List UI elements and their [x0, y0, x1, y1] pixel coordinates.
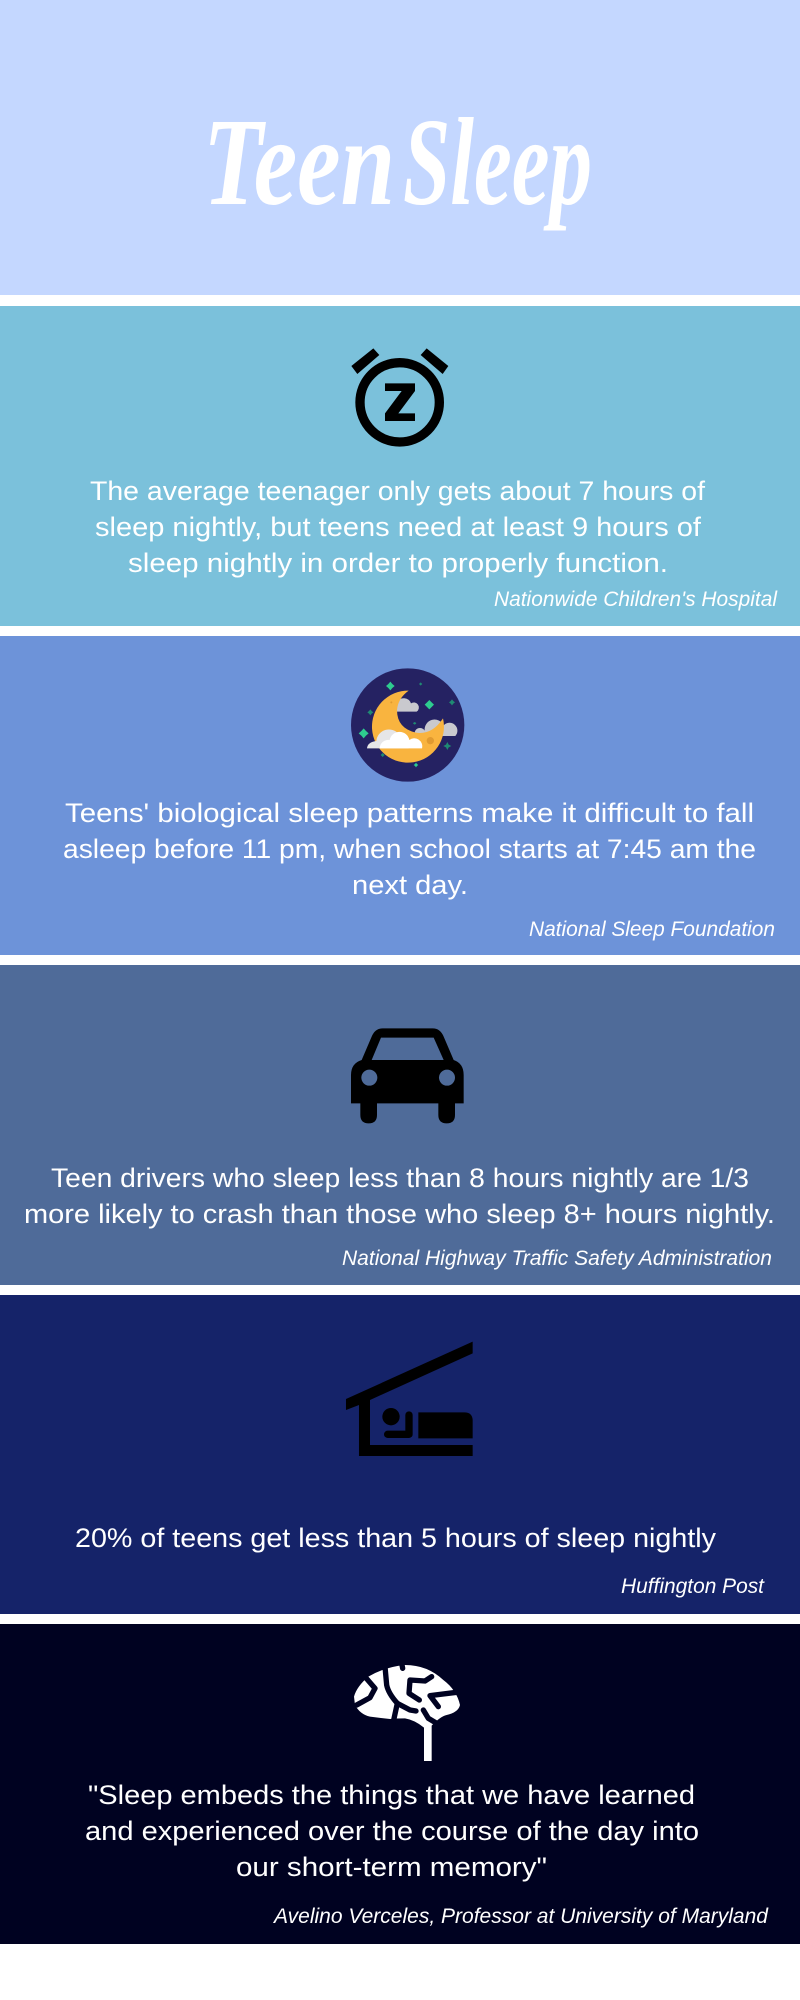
text: average sleep hours: sleep nightly in order to properly function.: [128, 548, 668, 578]
panel: teen drivers: [0, 965, 800, 1285]
source: Avelino Verceles: Avelino Verceles, Professor at University of Maryland: [272, 1904, 769, 1928]
text: average sleep hours: The average teenager only gets about 7 hours of: [90, 476, 706, 506]
text: drowsy driving: Teen drivers who sleep less than 8 hours nightly are 1/3: [51, 1163, 749, 1193]
text: sleep quote: [85, 1780, 699, 1882]
icon: alarm clock with Z: [351, 348, 448, 442]
source: National Sleep Foundation: National Sleep Foundation: [529, 917, 775, 941]
icon: brain tree: [354, 1663, 460, 1761]
title: Sleep: [403, 94, 592, 232]
text: average sleep hours: [90, 476, 706, 578]
text: biological sleep patterns: [63, 798, 756, 900]
panel: title banner: [0, 0, 800, 295]
text: drowsy driving: [24, 1163, 775, 1229]
text: sleep quote: "Sleep embeds the things that we have learned: [88, 1780, 695, 1810]
icon: car: [351, 1028, 464, 1123]
text: drowsy driving: more likely to crash than those who sleep 8+ hours nightly.: [24, 1199, 775, 1229]
source: Huffington Post: Huffington Post: [621, 1574, 765, 1598]
text: sleep quote: and experienced over the course of the day into: [85, 1816, 699, 1846]
panel: teen sleep hours: [0, 306, 800, 626]
title: [203, 94, 592, 232]
text: biological sleep patterns: next day.: [352, 870, 468, 900]
text: biological sleep patterns: Teens' biological sleep patterns make it difficult to fall: [65, 798, 754, 828]
icon: person in bed under roof: [346, 1342, 473, 1456]
panel: memory quote: [0, 1624, 800, 1944]
title: Teen: [203, 94, 395, 232]
text: sleep quote: our short-term memory": [236, 1852, 547, 1882]
source: National Highway Traffic Safety Administration: National Highway Traffic Safety Administration: [342, 1246, 772, 1270]
icon: moon and clouds: [351, 668, 464, 782]
panel: biological sleep patterns: [0, 636, 800, 955]
text: 20 percent statistic: 20% of teens get less than 5 hours of sleep nightly: [75, 1523, 717, 1553]
text: biological sleep patterns: asleep before 11 pm, when school starts at 7:45 am the: [63, 834, 756, 864]
panel: less than 5 hours: [0, 1295, 800, 1614]
text: average sleep hours: sleep nightly, but teens need at least 9 hours of: [95, 512, 702, 542]
source: Nationwide Children's Hospital: Nationwide Children's Hospital: [494, 587, 778, 611]
